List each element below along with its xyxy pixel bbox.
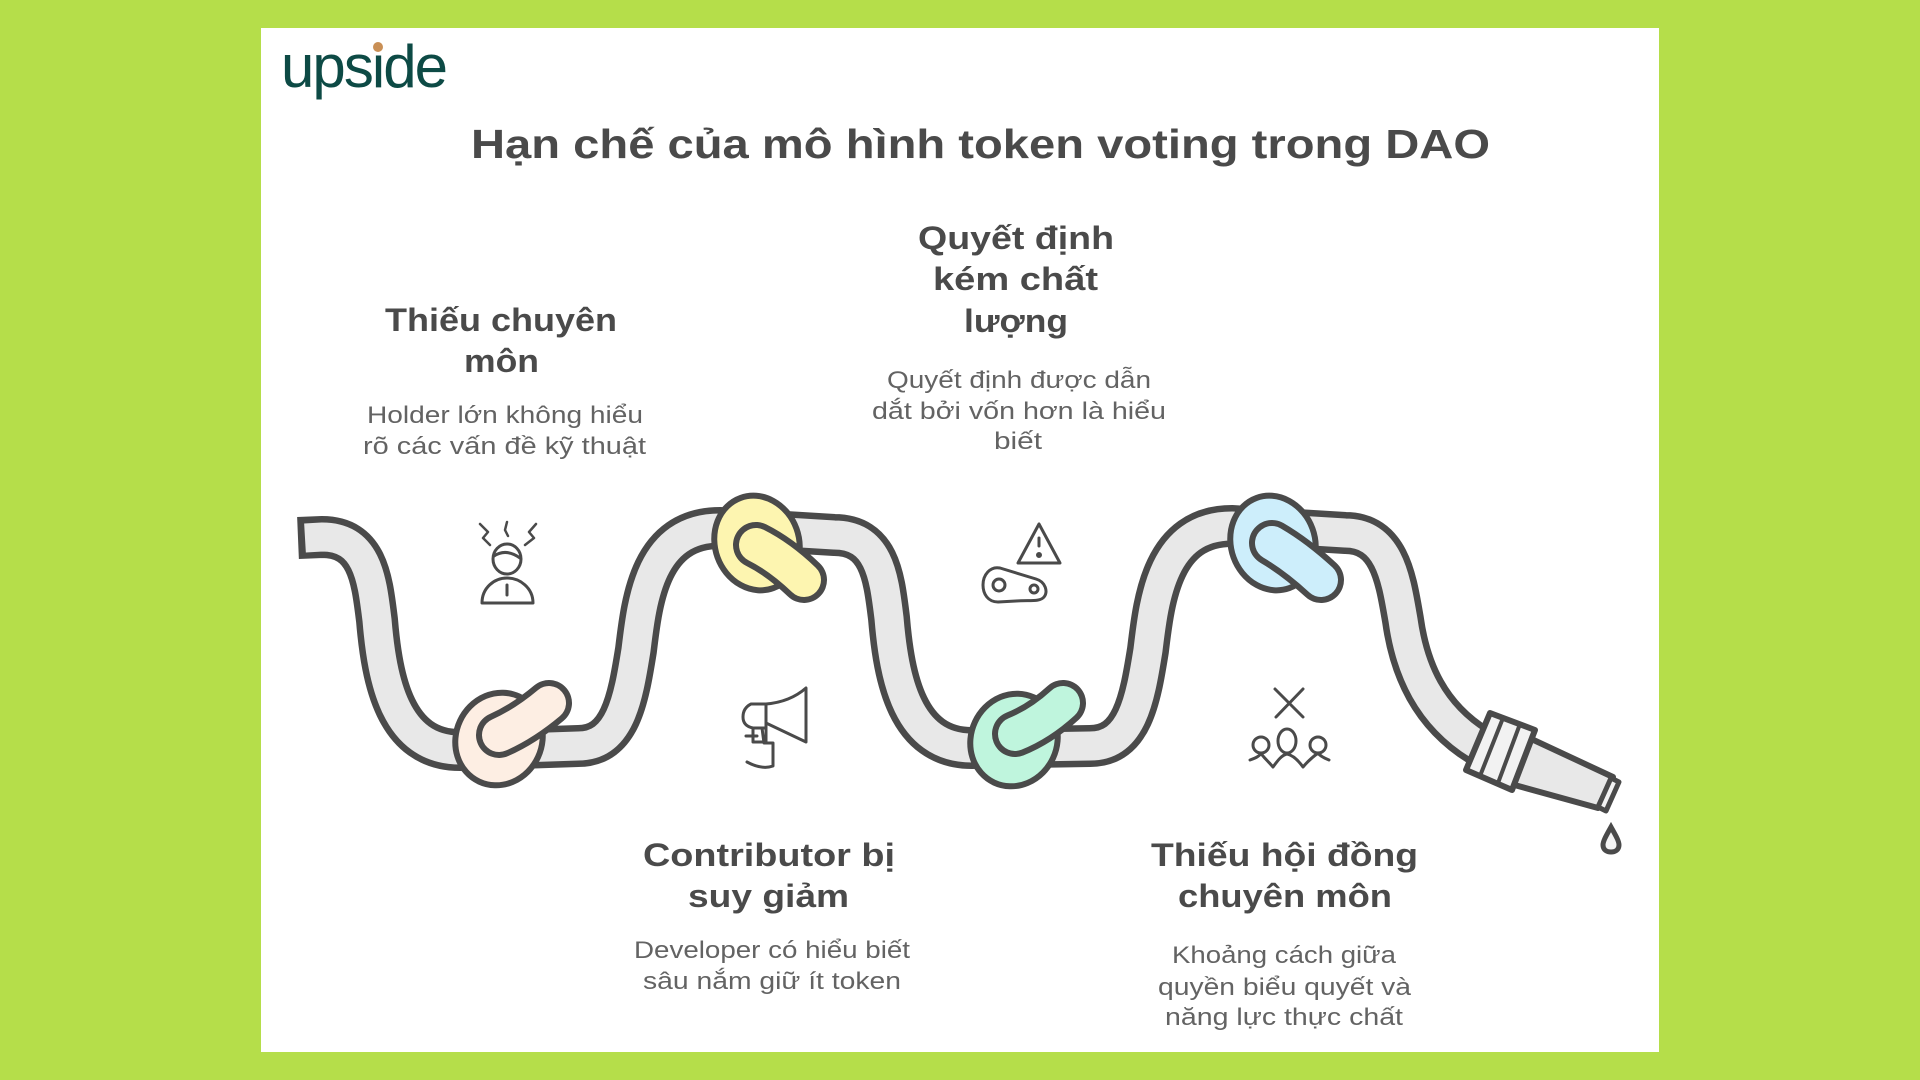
- step: Thiếu hội đồng chuyên môn: Thiếu hội đồng: [1151, 837, 1418, 873]
- step: Contributor bị suy giảm: suy giảm: [688, 878, 849, 914]
- diagram: knotted hose: [298, 484, 1619, 852]
- step: Contributor bị suy giảm: sâu nắm giữ ít token: [643, 968, 901, 995]
- step: Quyết định kém chất lượng: Quyết định: [918, 220, 1114, 256]
- step: Thiếu chuyên môn: Holder lớn không hiểu: [367, 402, 643, 429]
- hose outline: [298, 526, 1478, 750]
- logo: upside: upside: [281, 33, 448, 100]
- step: Thiếu chuyên môn: [363, 302, 646, 460]
- step: Contributor bị suy giảm: Developer có hiểu biết: [634, 937, 910, 964]
- step: Quyết định kém chất lượng: biết: [994, 428, 1042, 455]
- knot 2: yellow: [701, 484, 813, 602]
- step: Thiếu hội đồng chuyên môn: chuyên môn: [1178, 878, 1392, 914]
- step: Quyết định kém chất lượng: kém chất: [933, 261, 1098, 297]
- step: Thiếu hội đồng chuyên môn: năng lực thực chất: [1165, 1004, 1403, 1031]
- nozzle: [1466, 713, 1619, 811]
- step: Thiếu hội đồng chuyên môn: Khoảng cách giữa: [1172, 942, 1397, 969]
- icon: warning and chain link: [983, 524, 1060, 602]
- hose fill: [305, 526, 1478, 750]
- title: Hạn chế của mô hình token voting trong DAO: [471, 121, 1490, 167]
- step: Contributor bị suy giảm: Contributor bị: [643, 837, 895, 873]
- step: Thiếu hội đồng chuyên môn: quyền biểu quyết và: [1158, 974, 1412, 1001]
- step: Quyết định kém chất lượng: lượng: [964, 303, 1068, 339]
- step: Quyết định kém chất lượng: [872, 220, 1166, 455]
- step: Quyết định kém chất lượng: dắt bởi vốn hơn là hiểu: [872, 398, 1166, 425]
- knot 3: mint: [955, 679, 1073, 801]
- icon: megaphone: [743, 688, 806, 767]
- water drop: [1603, 827, 1619, 852]
- icon: stressed person: [480, 522, 536, 603]
- knot 4: blue: [1217, 484, 1329, 602]
- step: Thiếu hội đồng chuyên môn: [1151, 837, 1418, 1031]
- step: Thiếu chuyên môn: rõ các vấn đề kỹ thuật: [363, 433, 646, 460]
- step: Quyết định kém chất lượng: Quyết định được dẫn: [887, 367, 1151, 394]
- panel: white card: [261, 28, 1659, 1052]
- knot 1: peach: [440, 678, 558, 800]
- icon: team with cross: [1250, 689, 1329, 767]
- step: Thiếu chuyên môn: môn: [464, 343, 539, 379]
- step: Thiếu chuyên môn: Thiếu chuyên: [385, 302, 617, 338]
- step: Contributor bị suy giảm: [634, 837, 910, 995]
